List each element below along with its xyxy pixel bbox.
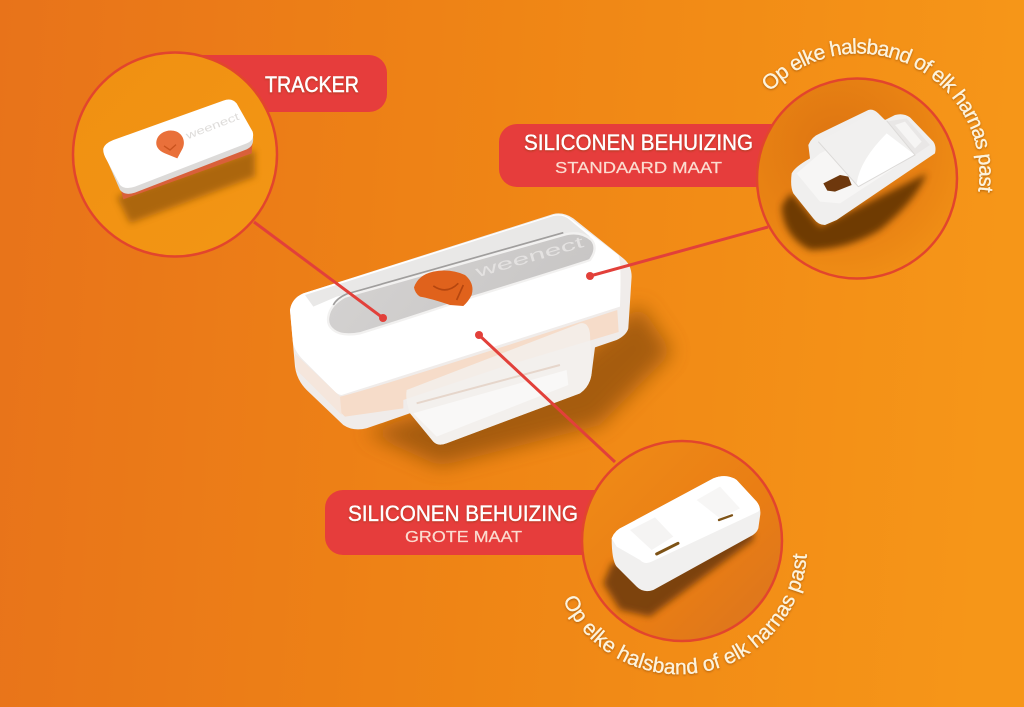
curved caption: large case: Op elke halsband of elk harnas past — [564, 554, 808, 676]
label: siliconen behuizing standaard maat: STANDAARD MAAT — [555, 160, 723, 177]
main device — [290, 213, 632, 445]
connector: standard case — [586, 227, 768, 280]
grey recess pill — [328, 233, 595, 334]
brand text: weenect — [472, 234, 587, 282]
label: siliconen behuizing grote maat: SILICONEN BEHUIZING — [348, 501, 578, 526]
standard case slot — [823, 175, 852, 192]
peach tracker band — [295, 310, 619, 417]
label: siliconen behuizing standaard maat — [499, 124, 800, 187]
panel: standard case circle — [757, 78, 957, 278]
label: siliconen behuizing standaard maat: SILICONEN BEHUIZING — [524, 130, 753, 155]
translucent case silhouette — [290, 213, 632, 445]
label: tracker — [190, 55, 387, 112]
tracker logo drop — [156, 131, 184, 158]
curved caption: standard case: Op elke halsband of elk harnas past — [762, 38, 993, 194]
clip tab — [406, 323, 592, 445]
panel: tracker circle — [73, 52, 277, 256]
orange logo drop — [414, 271, 472, 306]
connector: large case — [475, 331, 615, 462]
label: tracker: TRACKER — [265, 72, 359, 97]
panel: large case circle — [582, 441, 782, 641]
label: siliconen behuizing grote maat — [325, 490, 610, 555]
connector: tracker — [254, 222, 387, 322]
standard case device — [782, 110, 936, 250]
main device shadow — [365, 305, 672, 466]
tracker device — [103, 99, 255, 223]
large case device — [603, 476, 760, 617]
large case slots — [657, 543, 678, 554]
label: siliconen behuizing grote maat: GROTE MAAT — [405, 529, 523, 546]
white cover — [290, 214, 621, 395]
tracker brand text: weenect — [183, 111, 241, 143]
